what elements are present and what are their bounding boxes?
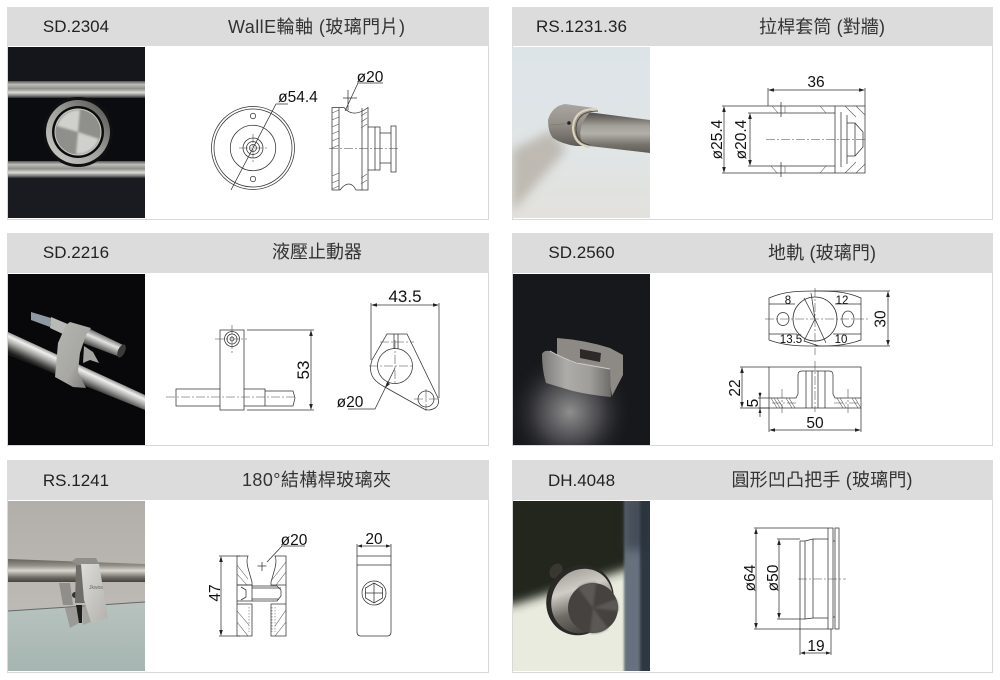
dimension: ø64: ø64 [742, 564, 759, 591]
product code: SD.2216 [43, 243, 109, 262]
dimension: 53: 53 [294, 361, 313, 379]
drawing: roller side view [329, 69, 398, 190]
dimension: ø50: ø50 [765, 564, 782, 591]
dimension: 43.5: 43.5 [388, 287, 422, 306]
dimension: ø25.4 [709, 106, 768, 173]
dimension: ø25.4: ø25.4 [709, 119, 726, 159]
drawing: roller front view [212, 89, 318, 190]
dimension: 5: 5 [745, 399, 762, 407]
panel: SD.2304 [7, 7, 489, 220]
photo: glass clamp on rod [8, 501, 145, 671]
panel: SD.2216 [7, 233, 489, 446]
dimension: ø20.4 [733, 113, 768, 166]
dimension: 30: 30 [872, 310, 890, 328]
drawing: clamp section [207, 532, 308, 636]
drawing: stopper side view [166, 325, 314, 410]
drawing: stopper front view [337, 287, 440, 411]
photo: round knob [513, 501, 650, 671]
dimension: 47: 47 [207, 584, 224, 602]
dimension: 8: 8 [785, 295, 791, 307]
product code: RS.1241 [43, 471, 109, 490]
product code: DH.4048 [548, 471, 615, 490]
header bar [512, 460, 993, 500]
dimension: 12: 12 [836, 295, 848, 307]
dimension: 22: 22 [727, 379, 744, 397]
drawing: clamp side view [357, 531, 391, 636]
dimension: 13.5: 13.5 [780, 334, 802, 346]
drawing: guide side view [727, 361, 861, 432]
product code: SD.2304 [43, 17, 109, 36]
header bar [512, 7, 993, 46]
product title: 液壓止動器 [272, 242, 362, 262]
dimension: 19: 19 [807, 638, 825, 655]
header bar [7, 460, 489, 500]
header bar [7, 7, 489, 46]
product title: WallE輪軸 (玻璃門片) [228, 17, 405, 37]
product code: RS.1231.36 [536, 17, 627, 36]
product title: 地軌 (玻璃門) [768, 243, 876, 263]
panel: RS.1241 [7, 460, 489, 672]
panel: SD.2560 [512, 233, 993, 446]
product title: 圓形凹凸把手 (玻璃門) [732, 470, 912, 490]
dimension: ø20: ø20 [281, 532, 308, 549]
dimension: 10: 10 [835, 334, 847, 346]
brand mark on clamp: Jkwos [89, 585, 103, 591]
dimension: 20: 20 [365, 531, 383, 548]
dimension: 53 [247, 330, 314, 410]
dimension: 36: 36 [807, 74, 825, 91]
drawing: sleeve section [709, 74, 867, 177]
dimension: ø20: ø20 [337, 394, 364, 411]
panel: DH.4048 [495, 460, 993, 675]
dimension: 50: 50 [806, 415, 824, 432]
photo: floor guide [513, 274, 650, 445]
dimension: ø54.4: ø54.4 [278, 89, 318, 106]
photo: rod sleeve on wall [512, 47, 650, 218]
photo: hydraulic stopper on rod [8, 274, 145, 445]
drawing: knob section [742, 528, 846, 655]
product code: SD.2560 [548, 243, 615, 262]
photo: roller on rails [8, 47, 145, 218]
header bar [512, 233, 993, 273]
drawing: guide top view [765, 288, 890, 355]
dimension: ø20.4: ø20.4 [733, 119, 750, 159]
product title: 180°結構桿玻璃夾 [242, 470, 391, 490]
product title: 拉桿套筒 (對牆) [759, 17, 885, 37]
dimension: ø20: ø20 [357, 69, 384, 86]
header bar [7, 233, 489, 273]
dimension: 36 [768, 74, 865, 106]
panel: RS.1231.36 [512, 7, 993, 220]
